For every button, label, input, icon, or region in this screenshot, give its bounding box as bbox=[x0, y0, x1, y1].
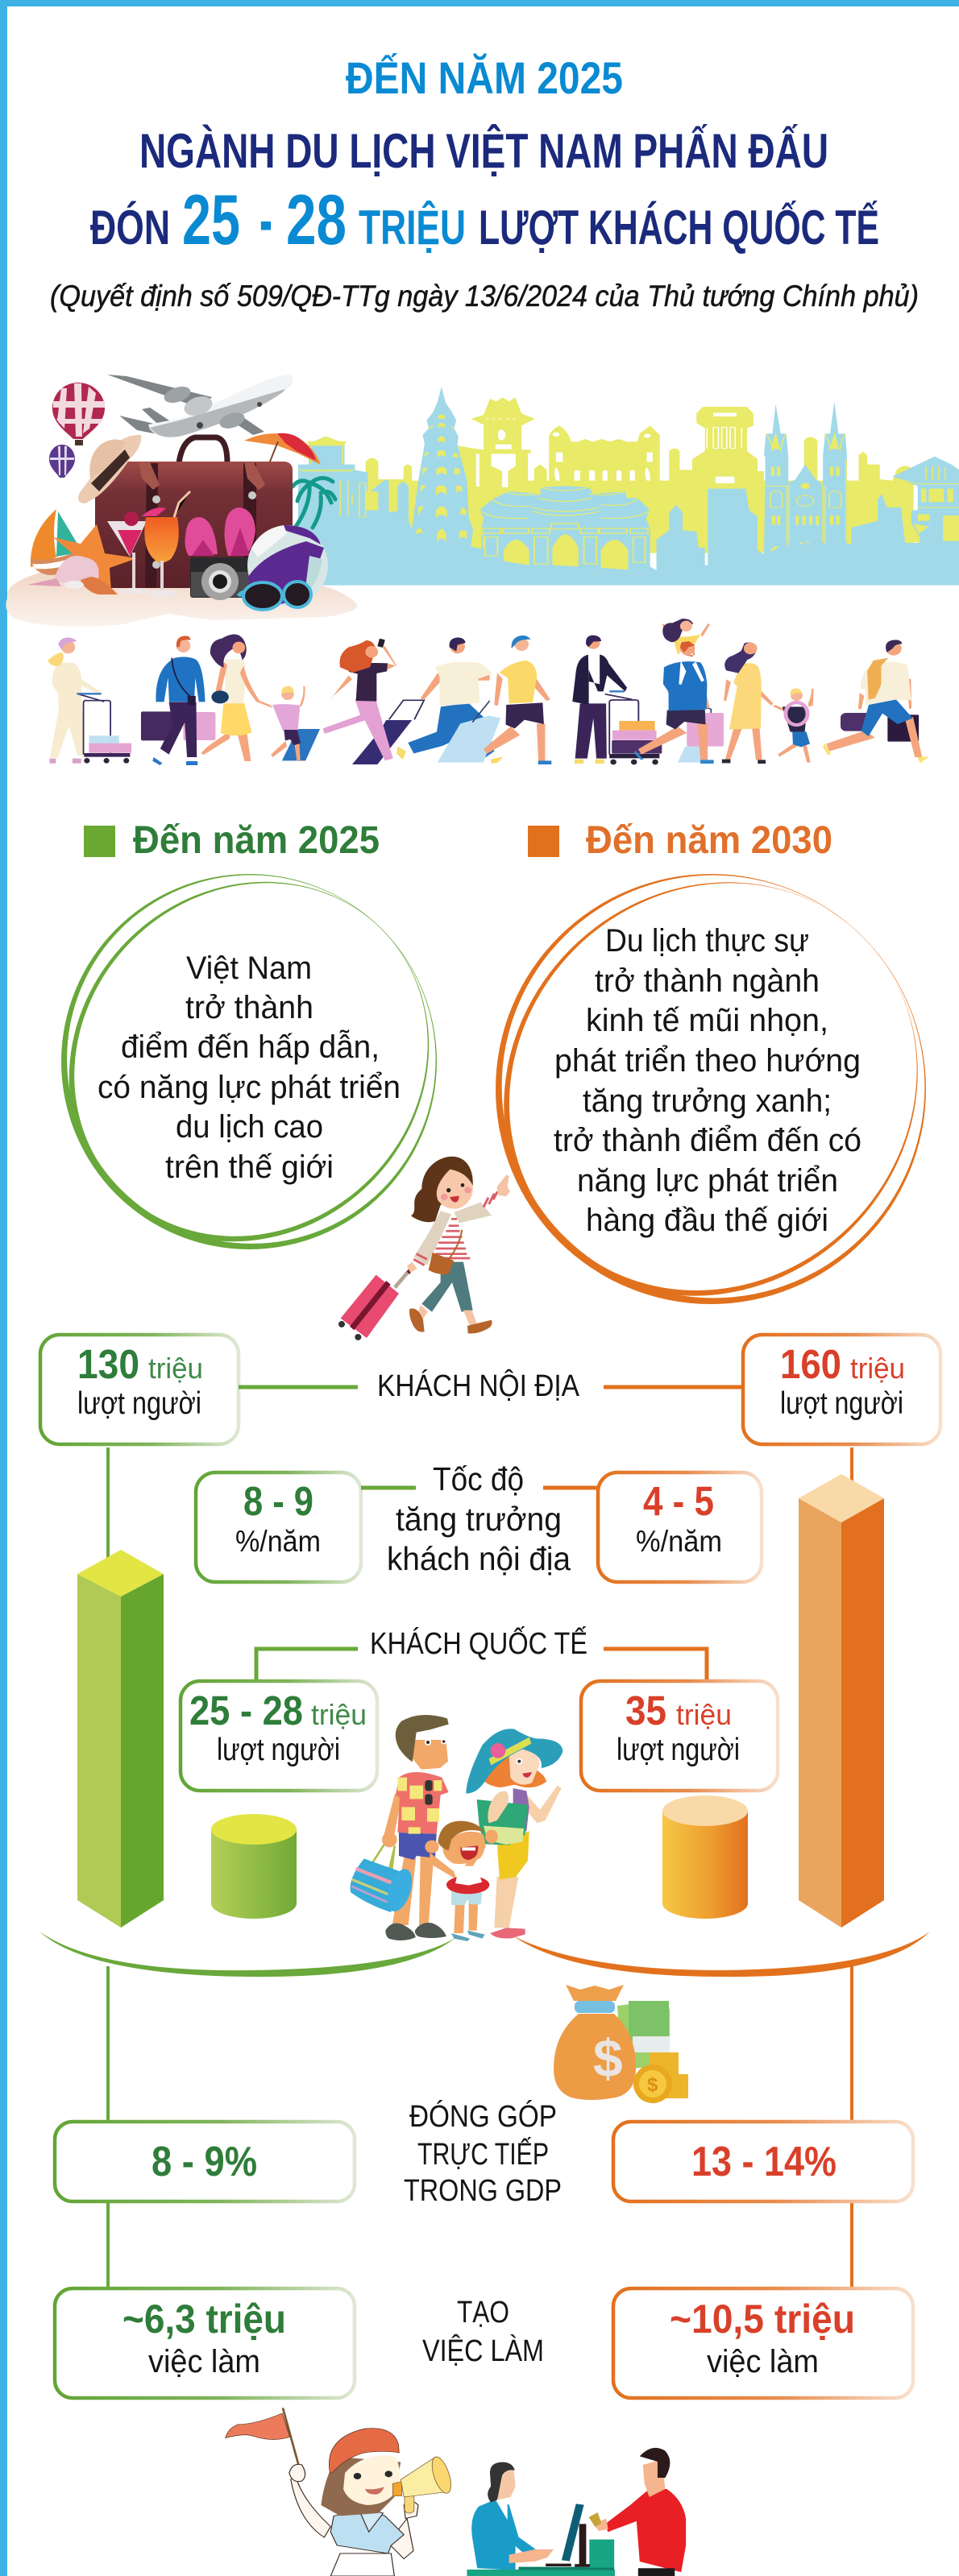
legend: 2030: Đến năm 2030 bbox=[586, 819, 832, 862]
label: TRONG GDP bbox=[404, 2174, 562, 2208]
pink and pale cases bbox=[678, 708, 724, 763]
box: 35 million: triệu bbox=[676, 1698, 732, 1731]
beach ball bbox=[247, 525, 328, 606]
title line 3: 25 bbox=[182, 180, 240, 259]
ring: green inner bbox=[0, 808, 503, 1315]
box: 160 million: triệu bbox=[850, 1352, 905, 1385]
suitcases bbox=[141, 711, 215, 740]
panel: goal 2025 circle bbox=[0, 796, 515, 1327]
connector: green down to bar bbox=[106, 1447, 110, 1563]
left temple bbox=[298, 437, 367, 516]
sand bbox=[6, 563, 357, 627]
illustration: cashier and customer bbox=[467, 2448, 686, 2576]
suitcase bbox=[338, 1267, 413, 1340]
row: domestic growth bbox=[196, 1460, 762, 1582]
title line 3: 28 bbox=[286, 180, 347, 259]
box: 25-28 million bbox=[181, 1681, 377, 1791]
traveller: woman with trolley bbox=[48, 637, 102, 764]
cylinder: international 2030 bbox=[662, 1795, 748, 1919]
illustration: row of travellers right bbox=[484, 619, 929, 764]
icon: money bag and coins: $ bbox=[593, 2028, 623, 2088]
label: KHÁCH QUỐC TẾ bbox=[370, 1625, 587, 1661]
row: international visitors bbox=[181, 1625, 778, 1791]
label bbox=[422, 2296, 544, 2368]
title line 3: - bbox=[259, 180, 272, 259]
box: 6.3 million jobs: ~6,3 triệu bbox=[122, 2296, 286, 2342]
white gaps in the silhouette bbox=[476, 412, 737, 487]
box: 4-5 %/year bbox=[598, 1472, 762, 1582]
orange drink bbox=[144, 491, 190, 598]
row: domestic visitors bbox=[40, 1335, 940, 1444]
torso and arms bbox=[407, 1174, 510, 1273]
text: goal 2030: năng lực phát triển bbox=[577, 1163, 838, 1199]
title line 3 bbox=[90, 180, 879, 259]
mother bbox=[466, 1729, 563, 1939]
shirt and arms bbox=[289, 2464, 418, 2576]
head bbox=[411, 1157, 473, 1222]
text: goal 2025: Việt Nam bbox=[186, 950, 312, 986]
seashells bbox=[27, 556, 118, 594]
connector: orange down to bar bbox=[850, 1447, 853, 1484]
yellow silhouette bbox=[366, 397, 914, 553]
cocktail glass bbox=[107, 507, 166, 594]
box: 25-28 million: triệu bbox=[311, 1698, 367, 1731]
illustration: city skyline bbox=[298, 387, 959, 586]
shoulder bag bbox=[429, 1230, 462, 1274]
label: KHÁCH NỘI ĐỊA bbox=[377, 1368, 580, 1403]
megaphone bbox=[392, 2455, 455, 2513]
label: TRỰC TIẾP bbox=[417, 2136, 549, 2172]
right pagoda bbox=[905, 489, 959, 542]
label: Tốc độ bbox=[433, 1460, 524, 1497]
label: khách nội địa bbox=[387, 1540, 571, 1577]
traveller: woman in yellow skirt bbox=[201, 634, 259, 761]
row: GDP contribution bbox=[55, 2099, 913, 2208]
illustration: girl pulling suitcase bbox=[338, 1157, 510, 1340]
text: goal 2025: điểm đến hấp dẫn, bbox=[121, 1029, 380, 1065]
base arc: 2030 bbox=[513, 1932, 930, 1977]
child with pink swim ring bbox=[773, 689, 814, 763]
cathedral details bbox=[771, 433, 840, 552]
text: goal 2025: du lịch cao bbox=[176, 1109, 323, 1145]
traveller: father carrying child bbox=[634, 619, 714, 764]
counter and monitor bbox=[467, 2504, 615, 2576]
cylinder: international 2025 bbox=[211, 1814, 297, 1919]
box: 6.3 million jobs: việc làm bbox=[148, 2344, 260, 2379]
illustration: travel still life with suitcase bbox=[6, 375, 357, 627]
label bbox=[387, 1460, 571, 1577]
citadel gate bbox=[504, 534, 629, 569]
connector right bbox=[604, 1385, 741, 1389]
child with blue case bbox=[255, 686, 320, 761]
legend: 2025: Đến năm 2025 bbox=[133, 819, 380, 862]
box: 130 million: 130 bbox=[77, 1341, 139, 1387]
box: 10.5 million jobs bbox=[613, 2288, 913, 2398]
small purple balloon bbox=[49, 445, 75, 478]
text: goal 2030: hàng đầu thế giới bbox=[586, 1203, 828, 1238]
text: goal 2025: trên thế giới bbox=[165, 1149, 334, 1185]
base arc: 2025 bbox=[39, 1932, 455, 1977]
text: goal 2030: phát triển theo hướng bbox=[554, 1043, 861, 1079]
traveller: old man in yellow shirt bbox=[484, 636, 551, 764]
traveller: man checking watch bbox=[396, 637, 500, 763]
hot air balloon red bbox=[52, 383, 105, 445]
box: 8-9 percent: 8 - 9% bbox=[152, 2139, 257, 2185]
customer bbox=[589, 2448, 686, 2576]
label bbox=[404, 2099, 562, 2208]
suitcase bbox=[95, 437, 293, 588]
illustration: row of travellers centre bbox=[396, 637, 500, 763]
box: 130 million: triệu bbox=[148, 1352, 203, 1385]
text: goal 2030: Du lịch thực sự bbox=[605, 923, 809, 959]
traveller: man in blue sweater bbox=[152, 636, 206, 765]
trolley with boxes bbox=[77, 694, 131, 764]
box: 8-9 %/year: %/năm bbox=[235, 1525, 321, 1558]
box: 160 million: 160 bbox=[780, 1341, 841, 1387]
connector right bbox=[604, 1649, 707, 1681]
box: 25-28 million: 25 - 28 bbox=[189, 1688, 303, 1733]
label: tăng trưởng bbox=[396, 1501, 562, 1538]
flag bbox=[226, 2408, 299, 2466]
ring: orange inner bbox=[418, 797, 959, 1381]
title line 3: ĐÓN bbox=[90, 201, 170, 255]
connector right bbox=[543, 1485, 598, 1490]
box: 130 million: lượt người bbox=[77, 1386, 201, 1421]
ring: green outer bbox=[0, 796, 515, 1327]
title line 3: TRIỆU bbox=[359, 201, 466, 255]
yellow pagoda windows bbox=[416, 414, 467, 542]
ring: orange outer bbox=[406, 785, 959, 1394]
connector left bbox=[361, 1485, 416, 1490]
box: 13-14 percent: 13 - 14% bbox=[691, 2139, 837, 2185]
box: 160 million bbox=[743, 1335, 940, 1444]
bar: domestic 2030 bbox=[799, 1474, 884, 1928]
row: job creation bbox=[55, 2288, 913, 2398]
icon: money bag and coins: $ bbox=[647, 2074, 658, 2096]
father bbox=[382, 1715, 449, 1940]
starfish bbox=[53, 524, 137, 592]
sailboat bbox=[31, 509, 82, 575]
text: goal 2025: có năng lực phát triển bbox=[98, 1070, 401, 1105]
head bbox=[321, 2429, 401, 2516]
traveller: running woman bbox=[323, 639, 424, 764]
connector left bbox=[256, 1649, 358, 1681]
text: goal 2030: trở thành ngành bbox=[595, 963, 820, 999]
label: ĐÓNG GÓP bbox=[409, 2099, 557, 2134]
box: 130 million bbox=[40, 1335, 239, 1444]
box: 8-9 percent bbox=[55, 2122, 355, 2201]
cashier bbox=[471, 2462, 554, 2570]
box: 13-14 percent bbox=[613, 2122, 913, 2201]
text: goal 2025 bbox=[98, 950, 401, 1185]
flip flops bbox=[185, 507, 255, 556]
label: TẠO bbox=[457, 2296, 509, 2330]
box: 25-28 million: lượt người bbox=[217, 1733, 340, 1767]
illustration: row of travellers left bbox=[48, 634, 424, 765]
connectors below arcs bbox=[108, 1966, 852, 2288]
sunglasses bbox=[239, 582, 311, 610]
box: 35 million: 35 bbox=[625, 1688, 666, 1733]
traveller: woman in yellow dress bbox=[722, 643, 773, 764]
traveller: man in dark jacket bbox=[572, 636, 627, 764]
beach umbrella bbox=[244, 433, 321, 466]
illustration: tourist family bbox=[351, 1715, 563, 1941]
icon: money bag and coins bbox=[554, 1985, 688, 2103]
title line 1: ĐẾN NĂM 2025 bbox=[346, 52, 623, 103]
box: 35 million bbox=[581, 1681, 778, 1791]
title bbox=[90, 52, 879, 259]
box: 160 million: lượt người bbox=[780, 1386, 903, 1421]
box: 10.5 million jobs: việc làm bbox=[707, 2344, 819, 2379]
palm tree bbox=[293, 478, 335, 528]
bar: domestic 2025 bbox=[77, 1550, 164, 1928]
connector left bbox=[239, 1385, 358, 1389]
base strip edge bbox=[469, 491, 764, 553]
traveller: running man with bags bbox=[823, 640, 929, 763]
airplane bbox=[107, 375, 293, 438]
box: 8-9 %/year bbox=[196, 1472, 361, 1582]
box: 35 million: lượt người bbox=[616, 1733, 740, 1767]
text: goal 2030: tăng trưởng xanh; bbox=[583, 1083, 832, 1119]
camera bbox=[190, 557, 250, 600]
panel: goal 2030 circle bbox=[406, 785, 959, 1394]
blue base and landmarks bbox=[298, 387, 959, 586]
box: 6.3 million jobs bbox=[55, 2288, 355, 2398]
box: 4-5 %/year: 4 - 5 bbox=[643, 1478, 714, 1524]
child bbox=[425, 1821, 498, 1941]
box: 10.5 million jobs: ~10,5 triệu bbox=[670, 2296, 855, 2342]
text: goal 2030: trở thành điểm đến có bbox=[554, 1123, 861, 1158]
trolley with luggage bbox=[605, 691, 662, 764]
text: goal 2025: trở thành bbox=[185, 990, 313, 1025]
box: 4-5 %/year: %/năm bbox=[636, 1525, 722, 1558]
box: 8-9 %/year: 8 - 9 bbox=[243, 1478, 313, 1524]
text: goal 2030: kinh tế mũi nhọn, bbox=[586, 1003, 828, 1038]
text: goal 2030 bbox=[554, 923, 861, 1238]
trousers and shoes bbox=[409, 1262, 492, 1333]
striped duffel bag bbox=[351, 1845, 417, 1915]
hat bbox=[78, 435, 141, 503]
label: VIỆC LÀM bbox=[422, 2334, 544, 2368]
illustration: tour guide with flag and megaphone bbox=[226, 2408, 455, 2576]
